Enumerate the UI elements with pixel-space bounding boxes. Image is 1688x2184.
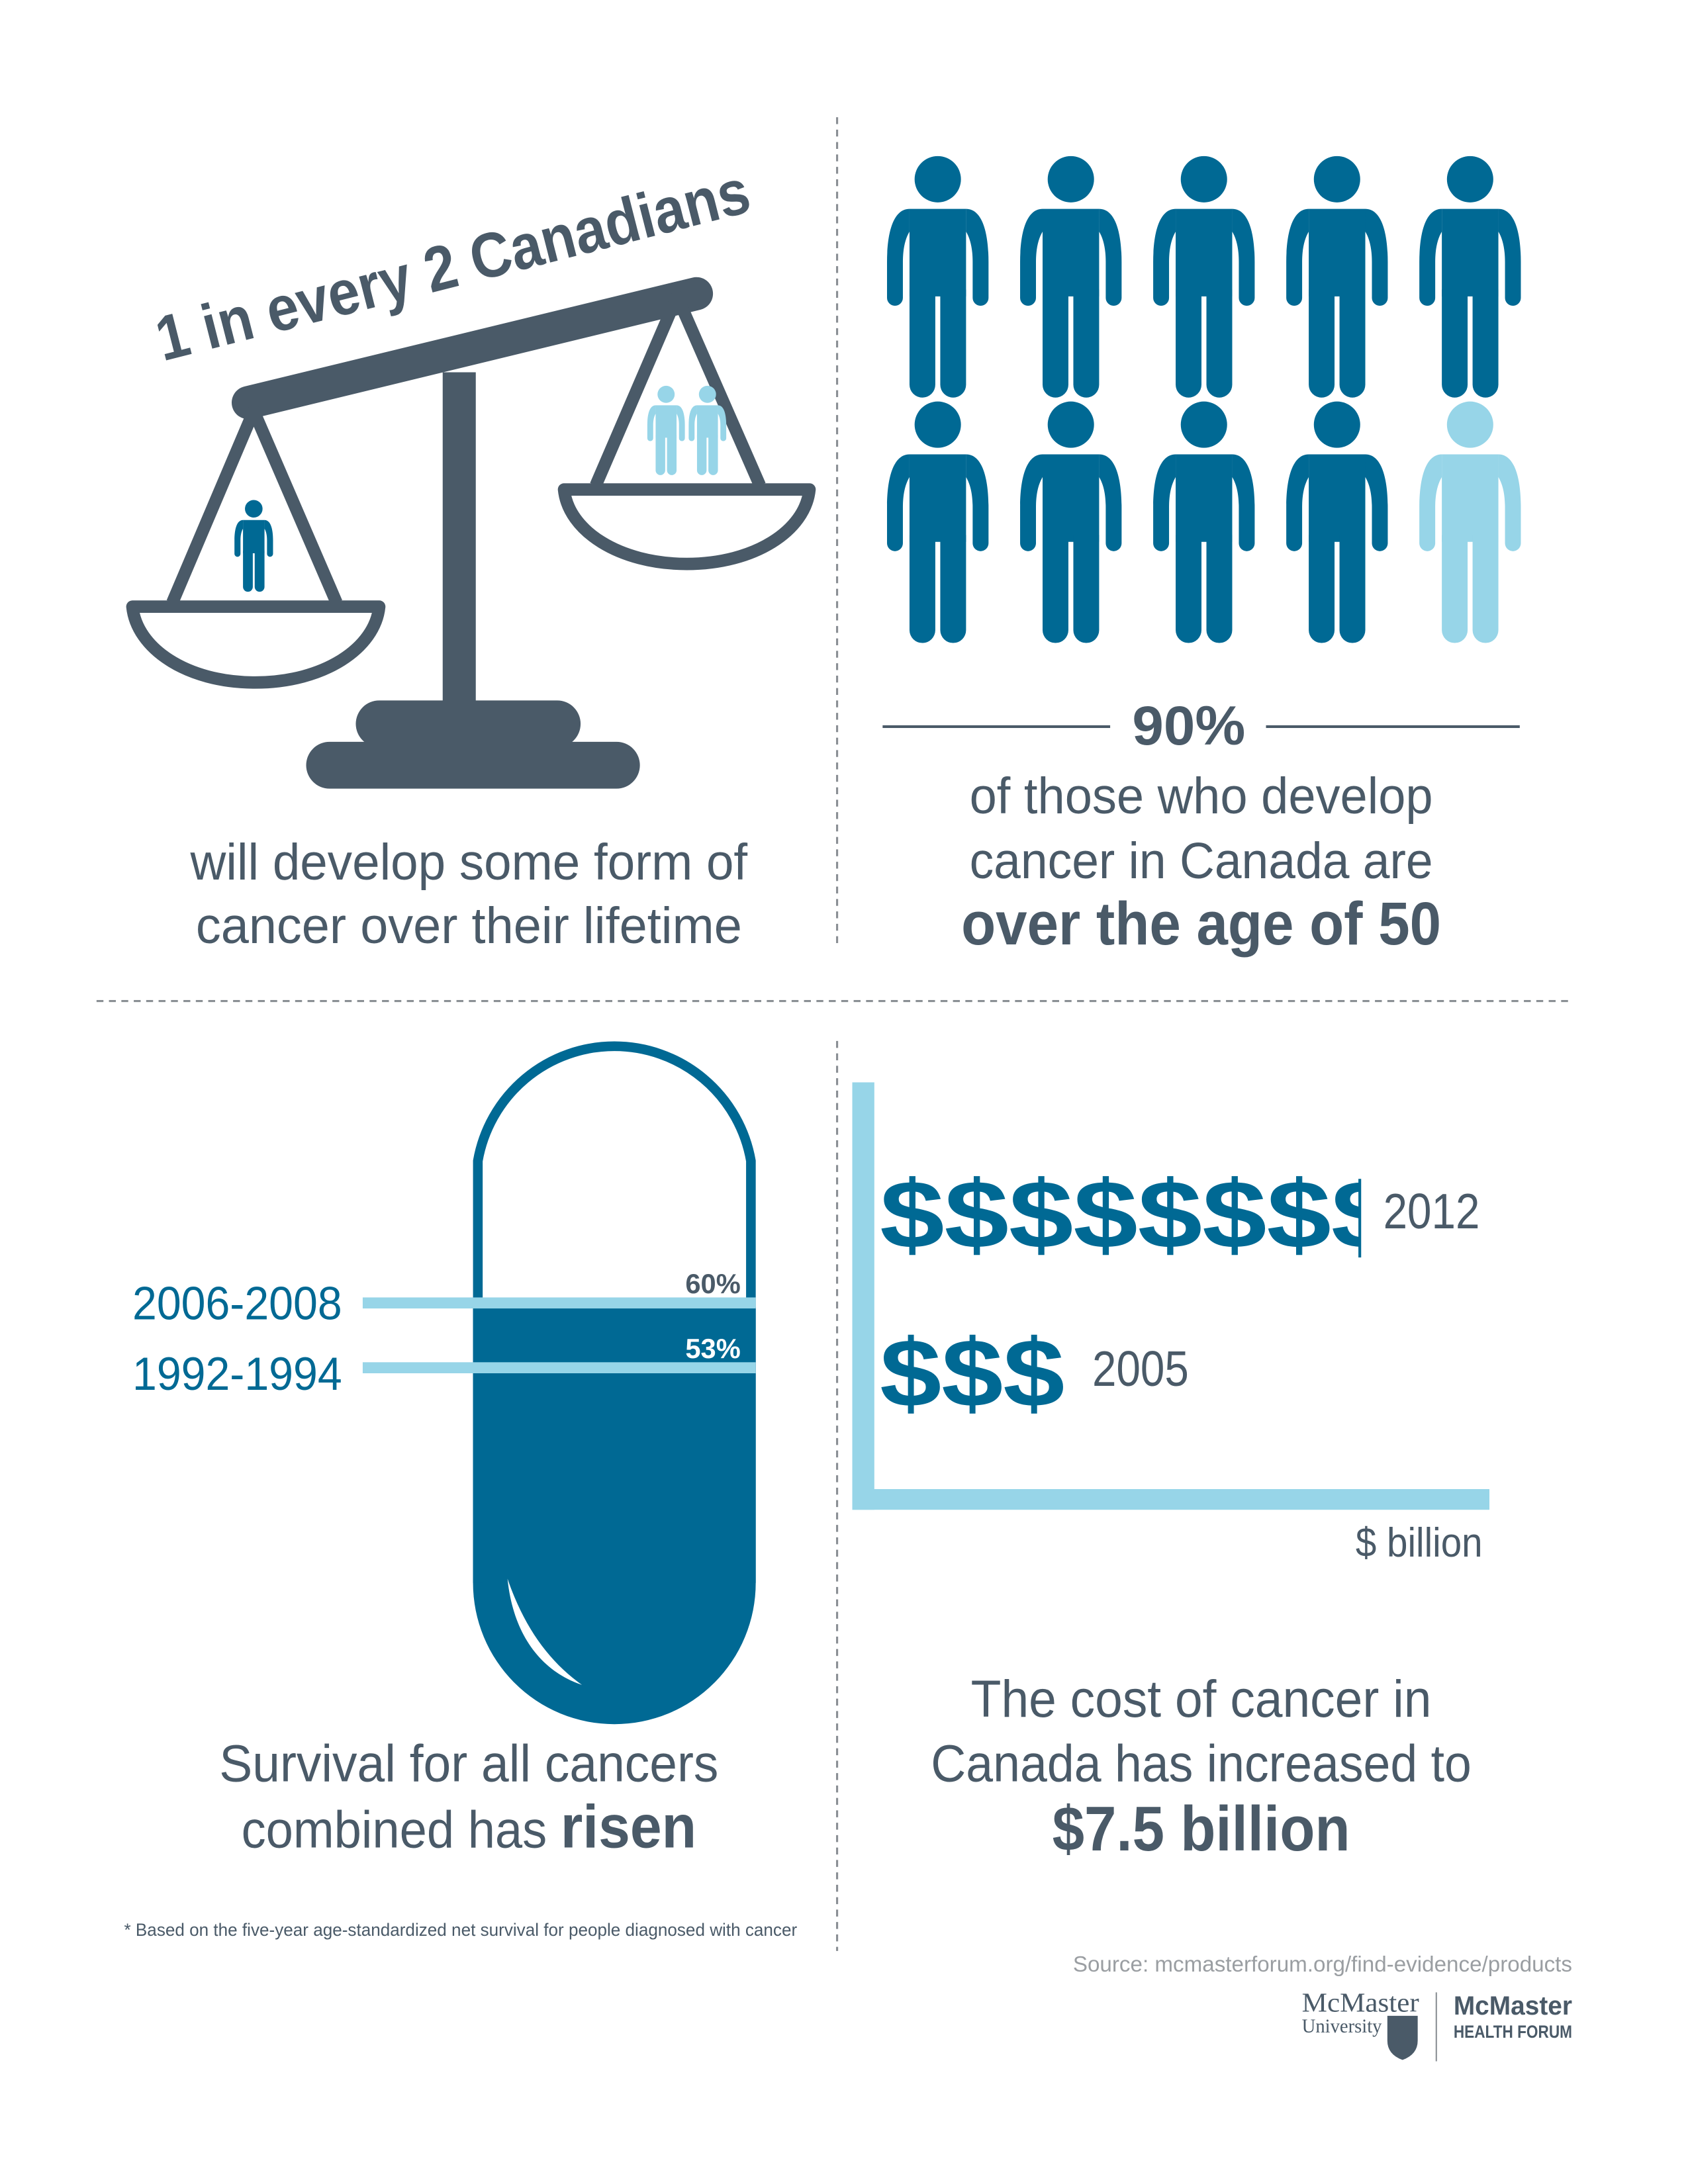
source: Source: mcmasterforum.org/find-evidence/products — [1073, 1952, 1572, 1977]
pictogram: 10 people — [887, 156, 1521, 643]
text: cost caption — [931, 1669, 1472, 1864]
chart: cost dollars: $$$$$$$$ — [880, 1160, 1395, 1268]
text: cost caption: $7.5 billion — [1053, 1794, 1350, 1864]
chart: cost dollars — [853, 1082, 1489, 1566]
logo: McMaster Health Forum: HEALTH FORUM — [1454, 2021, 1572, 2042]
text: survival caption: Survival for all cancers — [219, 1734, 718, 1793]
chart: cost dollars: 2012 — [1383, 1183, 1479, 1239]
stat: 90%: 90% — [1132, 695, 1245, 756]
icon: two persons light — [647, 386, 726, 475]
text: cost caption: The cost of cancer in — [971, 1669, 1431, 1728]
logo: McMaster University: University — [1302, 2016, 1382, 2037]
footnote: * Based on the five-year age-standardized net survival for people diagnosed with cancer — [124, 1919, 797, 1940]
icon: person dark — [234, 500, 273, 592]
text: over age 50: cancer in Canada are — [970, 833, 1433, 889]
text: lifetime caption: cancer over their lifetime — [196, 897, 742, 954]
chart: pill survival: 53% — [685, 1333, 741, 1364]
text: over age 50: over the age of 50 — [961, 890, 1441, 958]
text: lifetime caption — [190, 834, 748, 954]
logo: McMaster Health Forum: McMaster — [1454, 1991, 1572, 2021]
text: over age 50 — [961, 768, 1441, 958]
text: lifetime caption: will develop some form of — [190, 834, 748, 891]
logo: McMaster University — [1302, 1988, 1437, 2062]
text: cost caption: Canada has increased to — [931, 1734, 1472, 1793]
text: survival caption: combined has risen — [242, 1794, 696, 1861]
text: survival caption — [219, 1734, 718, 1861]
chart: cost dollars: 2005 — [1092, 1341, 1189, 1396]
chart: pill survival — [132, 1046, 756, 1724]
icon: balance scale — [132, 294, 810, 789]
chart: pill survival: 60% — [685, 1268, 741, 1299]
chart: pill survival: 2006-2008 — [132, 1278, 342, 1330]
chart: cost dollars: $ billion — [1356, 1520, 1483, 1566]
logo: McMaster Health Forum — [1454, 1991, 1572, 2042]
title: 1 in every 2 Canadians: 1 in every 2 Canadians — [149, 156, 757, 375]
chart: cost dollars: $$$ — [880, 1319, 1064, 1427]
chart: pill survival: 1992-1994 — [132, 1348, 342, 1400]
logo: McMaster University: McMaster — [1302, 1988, 1419, 2019]
text: over age 50: of those who develop — [970, 768, 1433, 825]
